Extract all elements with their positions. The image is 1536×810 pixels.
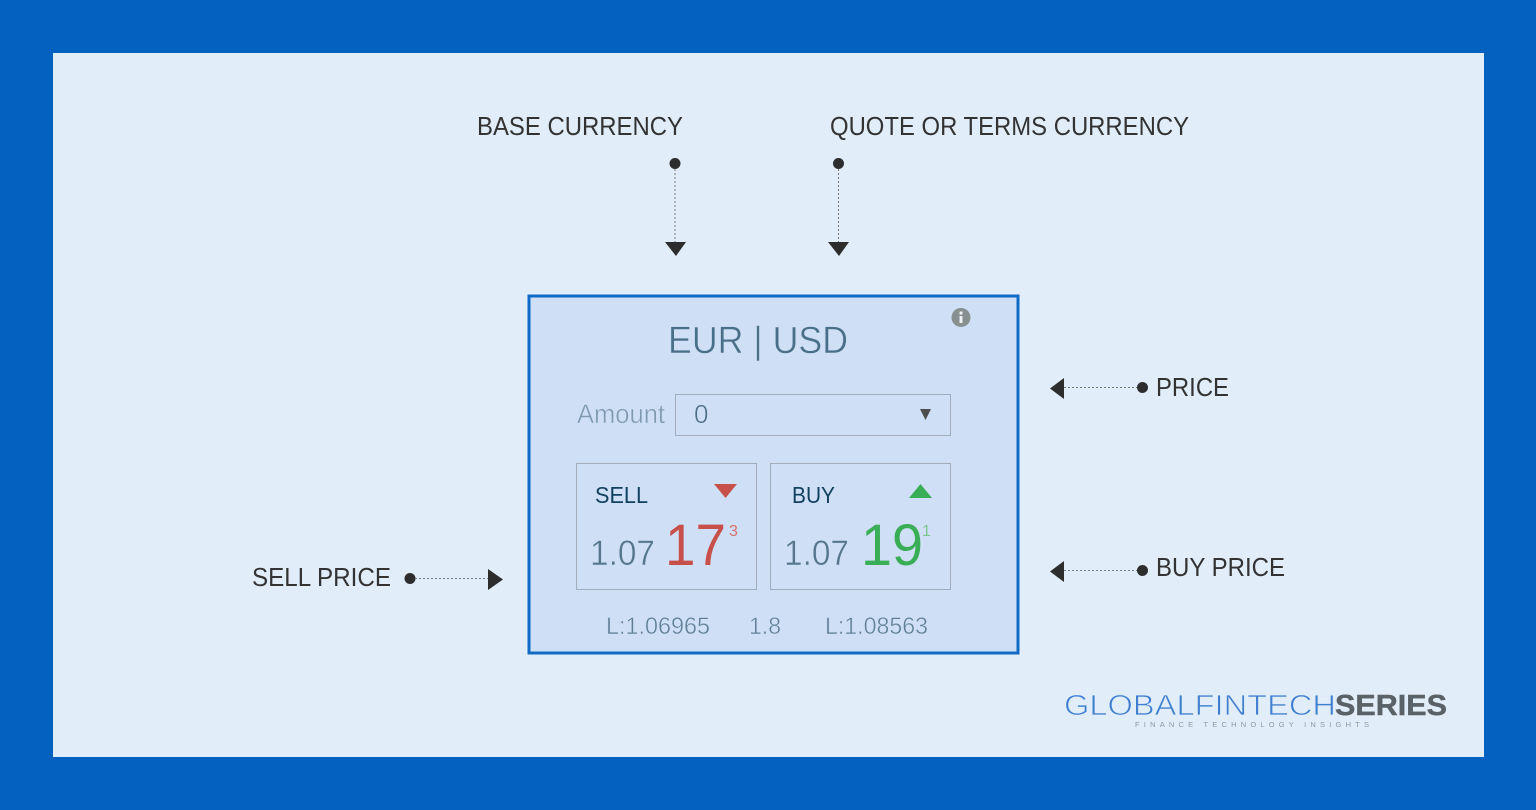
arrow: quote currency pointer: [828, 158, 849, 256]
low buy value: L:1.08563: [825, 613, 928, 640]
buy box: [770, 464, 950, 590]
logo: Global Fintech Series: SERIES: [1335, 690, 1447, 722]
label: price: PRICE: [1156, 372, 1229, 402]
buy box: 1: [922, 523, 931, 540]
sell box: 17: [665, 513, 726, 578]
icon: info: [952, 308, 970, 327]
arrow: buy price pointer: [1050, 561, 1148, 582]
sell box: SELL: [595, 482, 648, 508]
spread value: 1.8: [749, 613, 781, 640]
low sell value: L:1.06965: [606, 613, 710, 640]
sell box: [576, 464, 756, 590]
amount dropdown: [676, 394, 950, 436]
buy box: 19: [861, 513, 923, 578]
logo: Global Fintech Series: GLOBALFINTECH: [1064, 690, 1336, 722]
card background: [529, 296, 1018, 653]
logo: Global Fintech Series: FINANCE TECHNOLOGY INSIGHTS: [1135, 720, 1369, 729]
label: sell price: SELL PRICE: [252, 562, 391, 592]
buy box: BUY: [792, 482, 835, 508]
buy box: 1.07: [784, 534, 849, 573]
arrow: price pointer: [1050, 378, 1148, 399]
arrow: base currency pointer: [665, 158, 686, 256]
amount label: Amount: [577, 399, 665, 429]
label: quote or terms currency: QUOTE OR TERMS CURRENCY: [830, 111, 1189, 141]
card title: currency pair: EUR | USD: [668, 320, 848, 362]
amount dropdown: 0: [694, 399, 708, 429]
sell box: 1.07: [590, 534, 655, 573]
arrow: sell price pointer: [404, 569, 503, 590]
logo: Global Fintech Series: [1064, 690, 1447, 729]
label: base currency: BASE CURRENCY: [477, 111, 683, 141]
panel: quote card: [529, 296, 1018, 653]
sell box: 3: [729, 523, 738, 540]
label: buy price: BUY PRICE: [1156, 552, 1285, 582]
